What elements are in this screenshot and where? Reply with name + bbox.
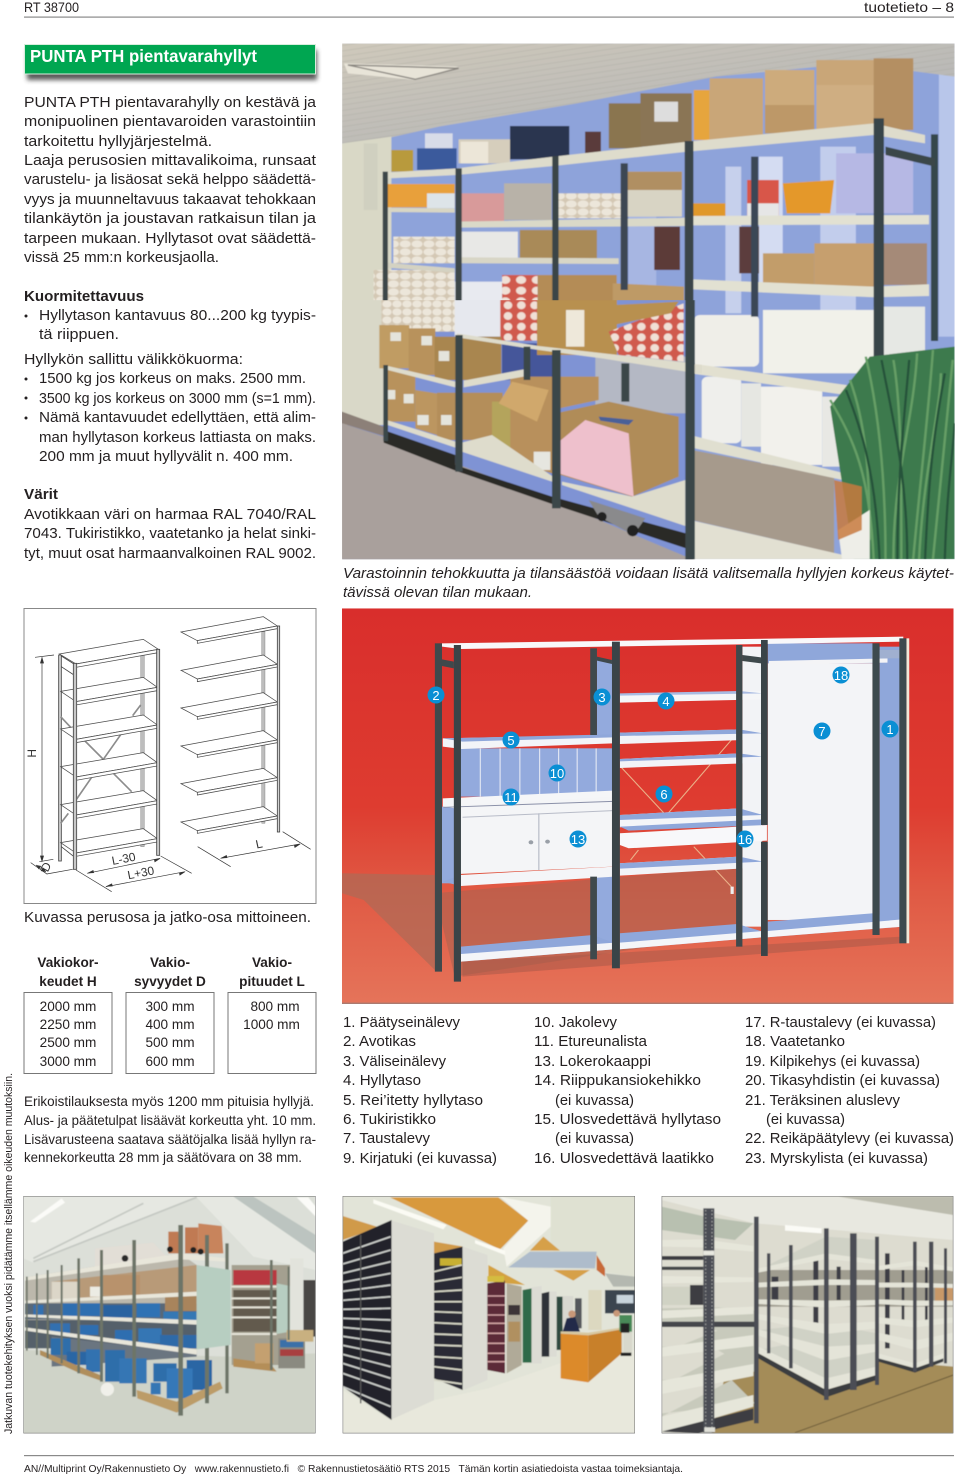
parts list: (ei kuvassa) <box>555 1092 634 1109</box>
title banner <box>24 44 317 80</box>
load capacity section: 3500 kg jos korkeus on 3000 mm (s=1 mm). <box>39 390 316 407</box>
colours section: 7043. Tukiristikko, vaatetanko ja helat sinki- <box>24 525 316 542</box>
part number badges <box>428 666 898 848</box>
part number badges: 3 <box>598 690 606 705</box>
parts list: 9. Kirjatuki (ei kuvassa) <box>343 1150 497 1167</box>
uprights <box>383 300 695 559</box>
plant <box>830 347 955 559</box>
standard sizes tables: syvyydet D <box>134 974 206 989</box>
notes text <box>24 1094 316 1165</box>
photo: warehouse with blue parts <box>23 1196 316 1433</box>
uprights <box>383 172 388 338</box>
parts list: 3. Väliseinälevy <box>343 1053 446 1070</box>
intro text <box>24 94 317 266</box>
drawing caption: Kuvassa perusosa ja jatko-osa mittoineen. <box>24 909 311 926</box>
boxes <box>609 103 642 148</box>
parts list: 7. Taustalevy <box>343 1130 430 1147</box>
cups above <box>381 300 455 332</box>
parts list: 22. Reikäpäätylevy (ei kuvassa) <box>745 1130 954 1147</box>
shelves <box>442 637 903 649</box>
parts list: 16. Ulosvedettävä laatikko <box>534 1150 714 1167</box>
rack 1 <box>343 1220 392 1420</box>
parts list: 14. Riippukansiokehikko <box>534 1072 701 1089</box>
parts list: (ei kuvassa) <box>555 1130 634 1147</box>
parts list: 10. Jakolevy <box>534 1014 617 1031</box>
vertical disclaimer: Jatkuvan tuotekehityksen vuoksi pidätämme itsellämme oikeuden muutoksiin. <box>3 1073 15 1434</box>
part number badges: 18 <box>834 668 848 683</box>
notes text: Lisävarusteena saatava säätöjalka lisää hyllyn ra- <box>24 1132 316 1147</box>
parts list: 5. Rei’itetty hyllytaso <box>343 1092 483 1109</box>
lower left of the photo: cartons, pink box and floor <box>342 300 702 559</box>
photo: hardware store aisles with orange counter <box>343 1196 635 1433</box>
parts list: 15. Ulosvedettävä hyllytaso <box>534 1111 721 1128</box>
intro text: vissä 25 mm:n korkeusjaolla. <box>24 249 219 266</box>
basic unit shelf <box>59 639 160 869</box>
uprights <box>703 1208 947 1433</box>
intro text: tarpeen mukaan. Hyllytasot ovat säädettä- <box>24 230 316 247</box>
middle rack shelves <box>764 1237 876 1378</box>
dimension lines: D <box>38 860 55 874</box>
shelves <box>25 1253 227 1355</box>
main rack goods <box>24 1259 197 1350</box>
extension unit shelf <box>181 617 280 833</box>
parts list <box>343 1014 954 1167</box>
standard sizes tables: 400 mm <box>145 1017 195 1032</box>
shelves <box>383 123 925 179</box>
load capacity section: Hyllytason kantavuus 80...200 kg tyypis- <box>39 307 316 324</box>
staff <box>563 1317 580 1332</box>
intro text: vyys ja muunneltavuus takaavat tehokkaan <box>24 191 316 208</box>
intro text: tarkoitettu hyllyjärjestelmä. <box>24 133 212 150</box>
counter <box>561 1333 588 1382</box>
intro text: monipuolinen pientavaroiden varastointiin <box>24 113 316 130</box>
parts list: 4. Hyllytaso <box>343 1072 421 1089</box>
standard sizes tables: Vakiokor- <box>37 955 99 970</box>
shelves <box>384 333 702 526</box>
part number badges: 7 <box>818 724 826 739</box>
pink foam box <box>555 402 679 497</box>
colours section: Avotikkaan väri on harmaa RAL 7040/RAL <box>24 506 316 523</box>
rack 2 <box>434 1247 463 1390</box>
intro text: varustelu- ja lisäosat sekä helppo säädettä- <box>24 171 316 188</box>
photo caption <box>343 565 954 601</box>
load capacity section: 1500 kg jos korkeus on maks. 2500 mm. <box>39 370 306 387</box>
header <box>24 0 954 18</box>
right rack shelves <box>878 1261 953 1368</box>
photo: empty grey shelving hall <box>662 1196 953 1433</box>
cartons <box>379 325 409 368</box>
load capacity section: tä riippuen. <box>39 326 119 343</box>
load capacity section: Kuormitettavuus <box>24 288 144 305</box>
parts list: 23. Myrskylista (ei kuvassa) <box>745 1150 928 1167</box>
parts list: 20. Tikasyhdistin (ei kuvassa) <box>745 1072 940 1089</box>
colours section: tyt, muut osat harmaanvalkoinen RAL 9002. <box>24 545 316 562</box>
parts list: (ei kuvassa) <box>766 1111 845 1128</box>
photo caption: Varastoinnin tehokkuutta ja tilansäästöä voidaan lisätä valitsemalla hyllyjen korkeus käytet- <box>343 565 954 582</box>
part number badges: 13 <box>571 832 585 847</box>
rack 3 <box>487 1281 505 1373</box>
colours section: Värit <box>24 486 58 503</box>
standard sizes tables: Vakio- <box>150 955 190 970</box>
dimension lines: L <box>254 836 264 852</box>
part number badges: 1 <box>886 722 894 737</box>
intro text: PUNTA PTH pientavarahylly on kestävä ja <box>24 94 317 111</box>
exploded shelf illustration with numbered parts <box>342 608 954 1004</box>
part number badges: 11 <box>504 790 518 805</box>
part number badges: 10 <box>550 766 564 781</box>
load capacity section <box>24 288 316 465</box>
cans and open carton <box>492 402 511 453</box>
uprights <box>435 643 442 972</box>
notes text: Alus- ja päätetulpat lisäävät korkeutta yht. 10 mm. <box>24 1113 316 1128</box>
dimension lines: L+30 <box>126 863 156 882</box>
load capacity section: Nämä kantavuudet edellyttäen, että alim- <box>39 409 316 426</box>
colours section <box>24 486 316 562</box>
standard sizes tables: 800 mm <box>250 999 300 1014</box>
parts list: 13. Lokerokaappi <box>534 1053 651 1070</box>
part number badges: 4 <box>662 694 670 709</box>
standard sizes tables: 2000 mm <box>40 999 96 1014</box>
intro text: Laaja perusosien mittavalikoima, runsaat <box>24 152 317 169</box>
standard sizes tables <box>24 955 316 1074</box>
parts list: 6. Tukiristikko <box>343 1111 436 1128</box>
notes text: kennekorkeutta 28 mm ja säätövara on 38 mm. <box>24 1150 302 1165</box>
parts list: 18. Vaatetanko <box>745 1033 845 1050</box>
standard sizes tables: 500 mm <box>145 1035 195 1050</box>
standard sizes tables: Vakio- <box>252 955 292 970</box>
load capacity section: Hyllykön sallittu välikkökuorma: <box>24 351 243 368</box>
parts list: 1. Päätyseinälevy <box>343 1014 460 1031</box>
parts list: 2. Avotikas <box>343 1033 416 1050</box>
parts list: 11. Etureunalista <box>534 1033 648 1050</box>
standard sizes tables: keudet H <box>39 974 97 989</box>
standard sizes tables: 2250 mm <box>40 1017 96 1032</box>
dimension lines <box>25 655 311 892</box>
hanging rail <box>768 658 888 664</box>
parts list: 19. Kilpikehys (ei kuvassa) <box>745 1053 920 1070</box>
trolley <box>589 500 645 535</box>
standard sizes tables: pituudet L <box>239 974 305 989</box>
pallets <box>137 1382 223 1413</box>
barrels <box>51 1338 71 1355</box>
load capacity section: 200 mm ja muut hyllyvälit n. 400 mm. <box>39 448 293 465</box>
parts list: 17. R-taustalevy (ei kuvassa) <box>745 1014 936 1031</box>
dimension lines: L-30 <box>111 850 137 868</box>
standard sizes tables: 2500 mm <box>40 1035 96 1050</box>
dimension lines: H <box>25 749 39 758</box>
title banner: PUNTA PTH pientavarahyllyt <box>30 46 257 66</box>
back panels <box>597 660 613 735</box>
dimension drawing <box>24 608 316 904</box>
standard sizes tables: 3000 mm <box>40 1054 96 1069</box>
main photo: loaded warehouse shelving <box>342 43 955 559</box>
standard sizes tables: 300 mm <box>145 999 195 1014</box>
photo caption: tävissä olevan tilan mukaan. <box>343 584 532 601</box>
part number badges: 16 <box>738 832 752 847</box>
parts list: 21. Teräksinen aluslevy <box>745 1092 900 1109</box>
footer: AN//Multiprint Oy/Rakennustieto Oy www.rakennustieto.fi © Rakennustietosäätiö RTS 2015 Tämän kortin asiatiedoista vastaa toimeksiantaja. <box>24 1463 683 1475</box>
part number badges: 2 <box>432 688 440 703</box>
standard sizes tables: 1000 mm <box>243 1017 300 1032</box>
second rack <box>232 1265 290 1365</box>
cabinet <box>459 797 613 874</box>
load capacity section: man hyllytason korkeus lattiasta on maks. <box>39 429 316 446</box>
part number badges: 6 <box>660 787 668 802</box>
part number badges: 5 <box>507 733 515 748</box>
standard sizes tables: 600 mm <box>145 1054 195 1069</box>
intro text: tilankäytön ja joustavan ratkaisun tilan ja <box>24 210 317 227</box>
left rack <box>662 1207 753 1240</box>
notes text: Erikoistilauksesta myös 1200 mm pituisia hyllyjä. <box>24 1094 314 1109</box>
far background dark frames <box>758 1270 953 1307</box>
